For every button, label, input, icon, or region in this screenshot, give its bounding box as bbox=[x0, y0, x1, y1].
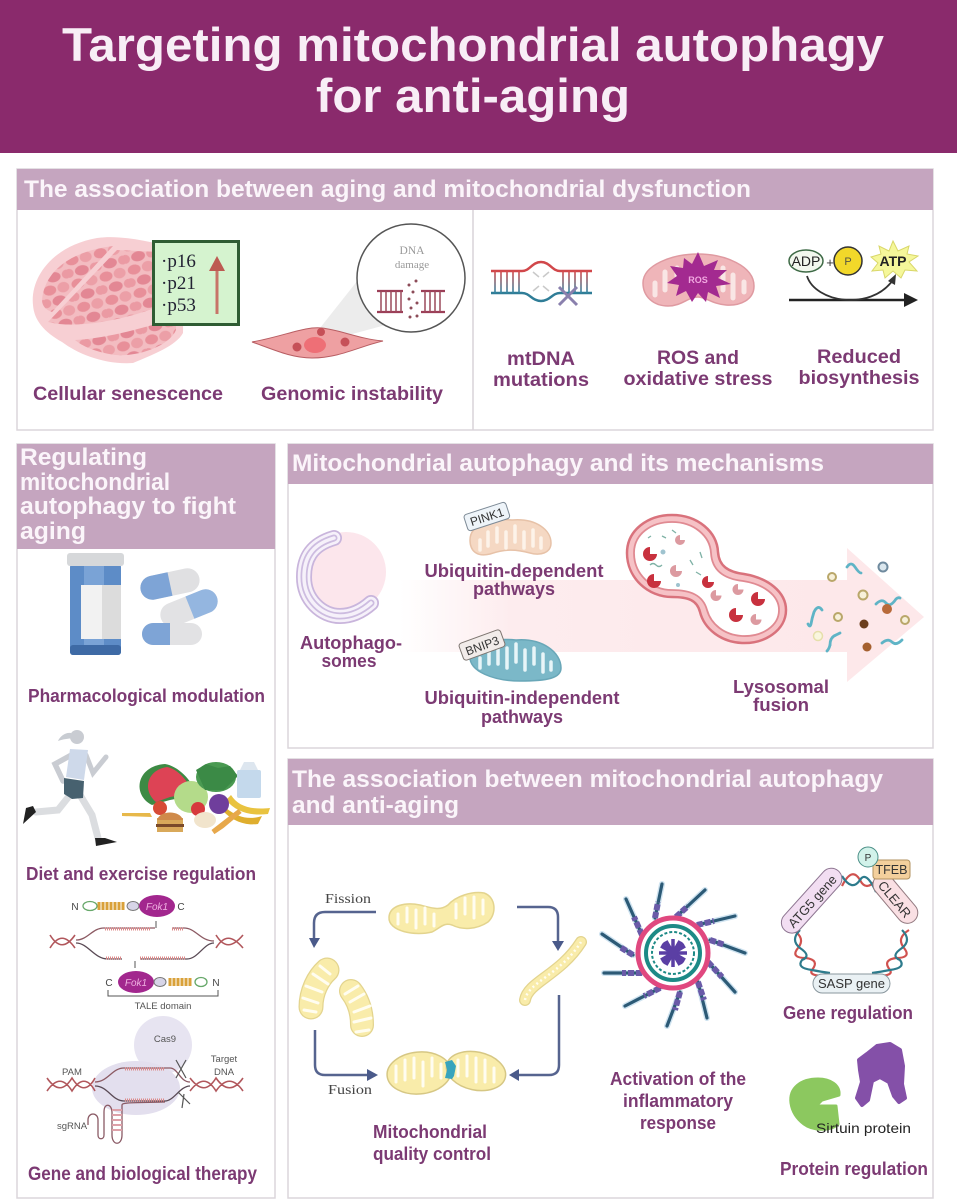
diagram: TALEN gene editing: N bbox=[71, 902, 79, 913]
green box: ·p21 bbox=[161, 273, 196, 294]
heading: association between mitochondrial autophagy and anti-aging: and anti-aging bbox=[292, 792, 459, 819]
title bbox=[62, 18, 884, 122]
icon: sirtuin proteins bbox=[791, 1044, 911, 1136]
icon: two fissioned mitochondria bbox=[303, 966, 371, 1032]
diagram: CRISPR Cas9: DNA bbox=[214, 1067, 235, 1078]
icon: ADP plus P to ATP bbox=[789, 241, 918, 307]
icon: ADP plus P to ATP: + bbox=[826, 255, 834, 270]
label: ubiquitin-dependent pathways: pathways bbox=[473, 579, 555, 599]
label: mitochondrial quality control: Mitochondrial bbox=[373, 1122, 487, 1142]
arrow: pathway flow bbox=[400, 548, 924, 682]
icon: ROS mitochondrion: ROS bbox=[688, 275, 708, 285]
label: activation of the inflammatory response: response bbox=[640, 1113, 716, 1133]
panel: association between aging and mitochondrial dysfunction bbox=[17, 169, 933, 430]
heading: association between mitochondrial autophagy and anti-aging bbox=[292, 766, 884, 819]
icon: sirtuin proteins: Sirtuin protein bbox=[816, 1120, 911, 1136]
diagram: CRISPR Cas9: sgRNA bbox=[57, 1121, 88, 1132]
label: mtDNA mutations second line: mutations bbox=[493, 370, 589, 391]
icon: cell with DNA damage inset bbox=[252, 224, 465, 358]
label: autophagosomes: somes bbox=[322, 651, 376, 671]
heading: regulating mitochondrial autophagy to fight aging: aging bbox=[20, 518, 86, 545]
label: activation of the inflammatory response: Activation of the bbox=[610, 1069, 746, 1089]
heading: regulating mitochondrial autophagy to fight aging: autophagy to fight bbox=[20, 493, 236, 520]
label: mitochondrial quality control bbox=[373, 1122, 491, 1164]
green box: ·p16 bbox=[161, 251, 196, 272]
label: mitochondrial quality control: quality control bbox=[373, 1144, 491, 1164]
icon: degradation products bbox=[808, 562, 909, 652]
label: pharmacological modulation: Pharmacological modulation bbox=[28, 686, 265, 706]
heading: regulating mitochondrial autophagy to fight aging bbox=[20, 444, 236, 545]
panel: regulating mitochondrial autophagy to fight aging bbox=[17, 444, 275, 1198]
diagram: TALEN gene editing: C bbox=[105, 978, 113, 989]
icon: PINK1 mitochondrion bbox=[463, 502, 551, 555]
diagram: TALEN gene editing: TALE domain bbox=[135, 1001, 191, 1012]
label: autophagosomes: Autophago- bbox=[300, 633, 402, 653]
icon: autophagosome bbox=[304, 532, 386, 616]
label: lysosomal fusion: fusion bbox=[753, 695, 809, 715]
icon: gene regulation plasmid: ATG5 gene bbox=[785, 872, 840, 931]
icon: gene regulation plasmid: SASP gene bbox=[818, 976, 885, 991]
icon: cell with DNA damage inset: DNA bbox=[400, 245, 425, 257]
diagram: TALEN gene editing: N bbox=[212, 978, 220, 989]
icon: senescent tissue with p16 p21 p53 box bbox=[33, 237, 238, 363]
icon: ADP plus P to ATP: ATP bbox=[880, 253, 906, 269]
arrows: cycle bbox=[309, 907, 564, 1081]
diagram: CRISPR Cas9 bbox=[47, 1016, 243, 1143]
icon: BNIP3 mitochondrion bbox=[458, 629, 561, 681]
green box: ·p53 bbox=[161, 295, 196, 316]
label: fission: Fission bbox=[325, 892, 371, 907]
label: ROS and oxidative stress: ROS and bbox=[657, 348, 739, 369]
icon: pill bottle and capsules bbox=[67, 553, 221, 655]
label: gene and biological therapy: Gene and biological therapy bbox=[28, 1164, 257, 1185]
label: protein regulation: Protein regulation bbox=[780, 1159, 928, 1179]
panel: association between mitochondrial autophagy and anti-aging bbox=[288, 759, 933, 1198]
heading: association between mitochondrial autophagy and anti-aging: The association between mitochondrial autophagy bbox=[292, 766, 884, 793]
icon: BNIP3 mitochondrion: BNIP3 bbox=[464, 633, 501, 658]
label: reduced biosynthesis: Reduced bbox=[817, 347, 901, 368]
icon: gene regulation plasmid bbox=[777, 847, 922, 993]
icon: ROS mitochondrion bbox=[643, 252, 754, 306]
label: cellular senescence: Cellular senescence bbox=[33, 384, 223, 405]
heading: mitochondrial autophagy and its mechanisms: Mitochondrial autophagy and its mechanisms bbox=[292, 450, 824, 477]
diagram: CRISPR Cas9: PAM bbox=[62, 1067, 82, 1078]
heading: regulating mitochondrial autophagy to fight aging: mitochondrial bbox=[20, 469, 170, 496]
label: ubiquitin-independent pathways: Ubiquitin-independent bbox=[424, 688, 620, 708]
diagram: fission and fusion cycle bbox=[303, 892, 581, 1098]
title: Targeting mitochondrial autophagy bbox=[62, 18, 884, 71]
diagram: TALEN gene editing: Fok1 bbox=[146, 902, 168, 913]
diagram: CRISPR Cas9: Target bbox=[211, 1054, 238, 1065]
icon: gene regulation plasmid: P bbox=[865, 853, 872, 864]
icon: elongated dividing mitochondrion bbox=[389, 893, 494, 933]
label: ubiquitin-independent pathways: pathways bbox=[481, 707, 563, 727]
diagram: TALEN gene editing bbox=[50, 895, 243, 1012]
icon: lysosome fusion bbox=[627, 515, 786, 643]
icon: PINK1 mitochondrion: PINK1 bbox=[468, 505, 506, 529]
label: autophagosomes bbox=[300, 633, 402, 671]
label: diet and exercise regulation: Diet and exercise regulation bbox=[26, 864, 256, 884]
label: ubiquitin-dependent pathways bbox=[424, 561, 604, 599]
title: for anti-aging bbox=[316, 69, 630, 122]
label: fusion: Fusion bbox=[328, 1083, 372, 1098]
label: lysosomal fusion bbox=[733, 677, 829, 715]
icon: runner bbox=[23, 730, 117, 846]
diagram: TALEN gene editing: Fok1 bbox=[125, 978, 147, 989]
icon: mtDNA mutation bbox=[491, 262, 592, 305]
label: ROS and oxidative stress second line: oxidative stress bbox=[624, 369, 772, 390]
label: gene regulation: Gene regulation bbox=[783, 1003, 913, 1023]
icon: fusing mitochondria bbox=[385, 1046, 509, 1097]
heading: regulating mitochondrial autophagy to fight aging: Regulating bbox=[20, 444, 147, 471]
label: genomic instability: Genomic instability bbox=[261, 384, 443, 405]
green box bbox=[154, 242, 238, 324]
icon: inflammasome bbox=[602, 884, 745, 1026]
label: activation of the inflammatory response: inflammatory bbox=[623, 1091, 733, 1111]
icon: gene regulation plasmid: CLEAR bbox=[875, 878, 914, 921]
icon: ADP plus P to ATP: P bbox=[844, 256, 852, 268]
label: lysosomal fusion: Lysosomal bbox=[733, 677, 829, 697]
label: mtDNA mutations: mtDNA bbox=[507, 349, 575, 370]
icon: cell with DNA damage inset: damage bbox=[395, 259, 429, 271]
heading: association between aging and mitochondrial dysfunction: The association between aging and mitochondrial dysfunction bbox=[24, 176, 751, 203]
label: ubiquitin-independent pathways bbox=[424, 688, 620, 727]
icon: gene regulation plasmid: TFEB bbox=[876, 863, 907, 877]
label: activation of the inflammatory response bbox=[610, 1069, 746, 1133]
icon: healthy food group bbox=[122, 762, 270, 832]
icon: ADP plus P to ATP: ADP bbox=[792, 253, 820, 269]
header banner bbox=[0, 0, 957, 153]
diagram: TALEN gene editing: C bbox=[177, 902, 185, 913]
diagram: CRISPR Cas9: Cas9 bbox=[154, 1034, 176, 1045]
icon: elongated thin mitochondrion bbox=[525, 942, 581, 1000]
panel: mitochondrial autophagy and its mechanisms bbox=[288, 444, 933, 748]
label: ubiquitin-dependent pathways: Ubiquitin-dependent bbox=[424, 561, 604, 581]
label: reduced biosynthesis second line: biosynthesis bbox=[798, 368, 920, 389]
